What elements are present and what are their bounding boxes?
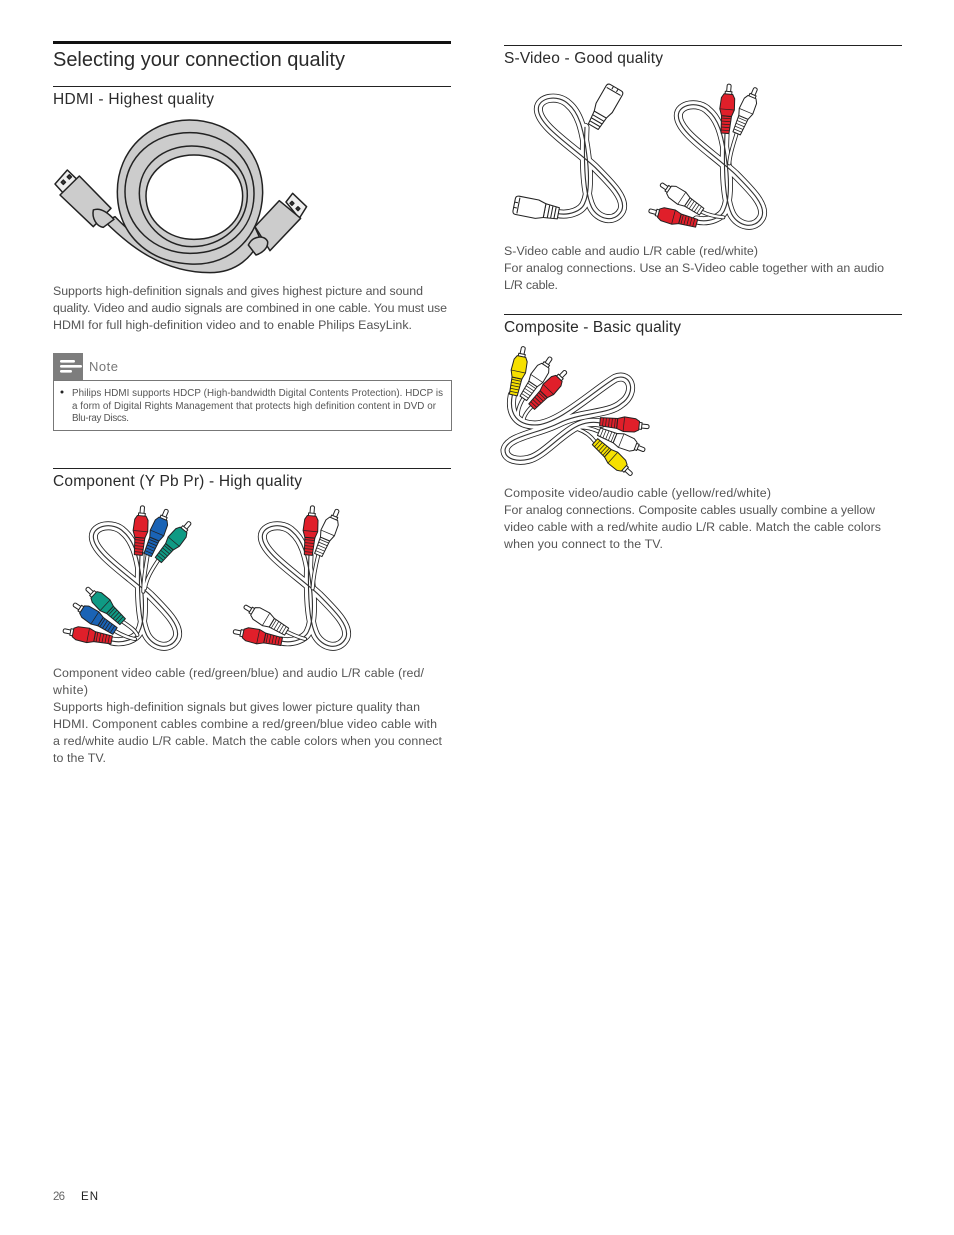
cable tail left <box>105 217 260 273</box>
footer: page number: 26 <box>53 1191 65 1203</box>
connector right <box>286 193 307 218</box>
text: HDMI description: Supports high-definition signals and gives highest picture and sound <box>53 284 423 298</box>
note text: a form of Digital Rights Management that protects high definition content in DVD or <box>72 401 437 412</box>
text: HDMI description: HDMI for full high-definition video and to enable Philips EasyLink. <box>53 318 412 332</box>
panel: note <box>53 353 452 430</box>
bullet <box>60 390 64 394</box>
icon: S-Video cable <box>512 83 624 222</box>
icon: HDMI cable coil <box>55 120 307 273</box>
note text <box>72 388 443 424</box>
coil <box>117 120 263 264</box>
text: component description: Component video cable (red/green/blue) and audio L/R cable (red/ <box>53 666 425 680</box>
title <box>53 41 451 71</box>
text: S-Video description: S-Video cable and audio L/R cable (red/white) <box>504 244 758 258</box>
note label: Note <box>89 359 118 374</box>
text: S-Video description <box>504 244 884 292</box>
text: composite description: when you connect to the TV. <box>503 537 663 551</box>
text: HDMI description: quality. Video and audio signals are combined in one cable. You must use <box>53 301 447 315</box>
text: S-Video description: For analog connections. Use an S-Video cable together with an audio <box>504 261 884 275</box>
icon: audio L/R cable <box>232 505 347 649</box>
heading: HDMI: HDMI - Highest quality <box>53 91 214 108</box>
text: component description: a red/white audio L/R cable. Match the cable colors when you connect <box>53 734 443 748</box>
text: composite description: For analog connections. Composite cables usually combine a yellow <box>504 503 875 517</box>
text: S-Video description: L/R cable. <box>504 278 558 292</box>
footer: page number: EN <box>81 1191 98 1203</box>
text: composite description: video cable with a red/white audio L/R cable. Match the cable colors <box>504 520 881 534</box>
icon: audio L/R cable <box>647 84 763 230</box>
heading: S-Video: S-Video - Good quality <box>504 50 663 67</box>
icon: component video cable <box>62 505 196 647</box>
text: component description <box>52 666 443 765</box>
text: composite description <box>503 486 881 551</box>
text: component description: HDMI. Component cables combine a red/green/blue video cable with <box>53 717 437 731</box>
heading: Composite: Composite - Basic quality <box>504 319 681 336</box>
icon: note <box>53 353 83 380</box>
note box <box>54 380 452 430</box>
heading: Component: Component (Y Pb Pr) - High quality <box>53 473 302 490</box>
footer: page number <box>53 1191 98 1203</box>
connector left <box>55 170 79 195</box>
title: Selecting your connection quality <box>53 49 345 71</box>
text: component description: to the TV. <box>53 751 106 765</box>
text: component description: Supports high-definition signals but gives lower picture quality than <box>53 700 420 714</box>
text: component description: white) <box>52 683 88 697</box>
note text: Philips HDMI supports HDCP (High-bandwidth Digital Contents Protection). HDCP is <box>72 388 443 399</box>
icon: composite cable <box>505 345 650 480</box>
text: composite description: Composite video/audio cable (yellow/red/white) <box>504 486 771 500</box>
note text: Blu-ray Discs. <box>72 413 129 424</box>
text: HDMI description <box>53 284 447 332</box>
